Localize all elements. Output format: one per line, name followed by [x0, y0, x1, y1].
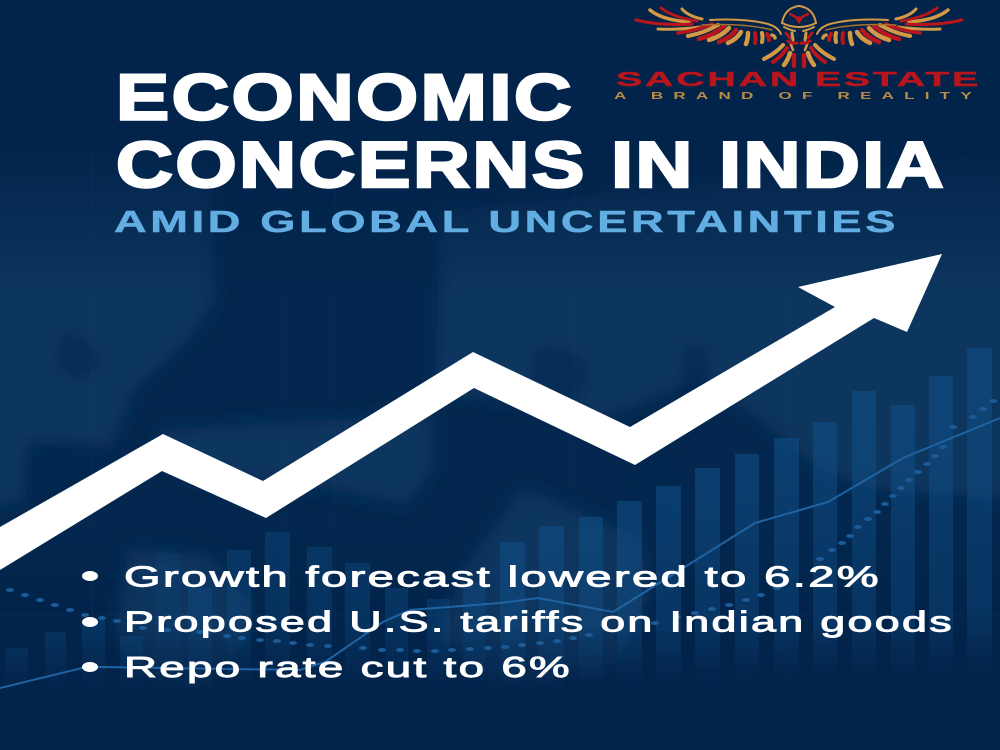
title: CONCERNS IN INDIA — [116, 128, 946, 201]
title: ECONOMIC — [116, 60, 574, 134]
world map silhouette — [0, 150, 1000, 715]
title — [116, 60, 946, 201]
brand name: SACHAN ESTATE — [616, 68, 981, 91]
tagline: A BRAND OF REALITY — [614, 91, 982, 102]
dotted trend line — [6, 399, 997, 653]
bullet list — [82, 562, 954, 684]
icon: eagle — [636, 6, 962, 66]
bullet: tariffs — [82, 606, 954, 638]
bullet: growth forecast — [82, 562, 881, 594]
bullet: tariffs: Proposed U.S. tariffs on Indian goods — [124, 606, 954, 638]
arrow — [0, 254, 942, 570]
bar chart backdrop — [0, 348, 1000, 750]
trend line — [0, 418, 1000, 688]
bullet: growth forecast: Growth forecast lowered to 6.2% — [124, 562, 881, 594]
subtitle: AMID GLOBAL UNCERTAINTIES — [114, 204, 899, 239]
bullet: repo rate: Repo rate cut to 6% — [124, 652, 572, 684]
bullet: repo rate — [82, 652, 572, 684]
logo — [614, 6, 982, 102]
